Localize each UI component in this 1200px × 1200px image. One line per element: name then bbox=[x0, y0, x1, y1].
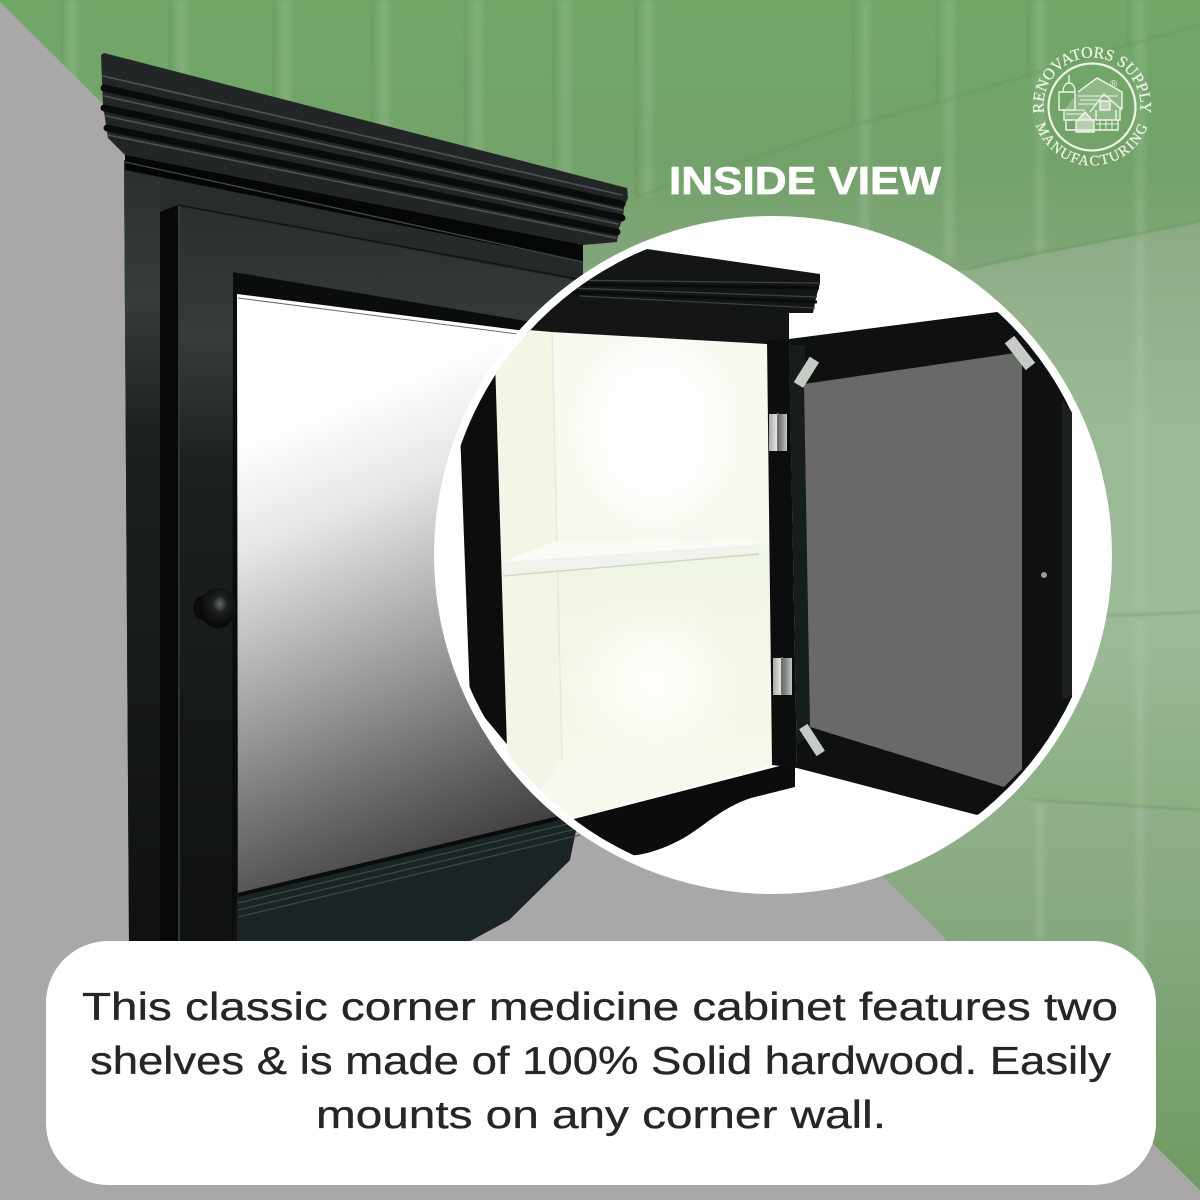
white lens disc bbox=[434, 216, 1112, 894]
logo house icon bbox=[1059, 75, 1122, 132]
interior side wall bbox=[496, 330, 562, 790]
description text: mounts on any corner wall. bbox=[316, 1094, 886, 1137]
mirror clips bbox=[794, 336, 1035, 756]
mirror front bbox=[237, 294, 580, 893]
mirror trim bbox=[232, 272, 580, 941]
inside view cabinet photo bbox=[460, 248, 1110, 860]
description text: shelves & is made of 100% Solid hardwood. Easily bbox=[90, 1040, 1112, 1083]
heading: inside view: INSIDE VIEW bbox=[669, 160, 941, 203]
inside view lens bbox=[434, 216, 1112, 894]
hinge top bbox=[769, 413, 787, 451]
description text bbox=[82, 986, 1118, 1137]
description panel bbox=[46, 941, 1156, 1185]
hinge bottom bbox=[773, 657, 792, 695]
hinge column bbox=[767, 339, 797, 768]
bottom rail bbox=[238, 811, 580, 941]
door stile and rails bbox=[180, 207, 583, 941]
cabinet body bbox=[124, 160, 583, 941]
door knob bbox=[193, 588, 236, 628]
interior floor bbox=[542, 760, 771, 819]
crown moulding bbox=[101, 53, 628, 262]
left side stile bbox=[124, 160, 160, 941]
cabinet apron bbox=[574, 766, 795, 856]
door mirror back bbox=[804, 352, 1022, 787]
front view cabinet bbox=[101, 53, 628, 941]
logo: Renovators Supply Manufacturing bbox=[1033, 46, 1152, 166]
back wall highlights bbox=[585, 345, 725, 735]
logo ring text bottom: MANUFACTURING bbox=[1036, 121, 1147, 166]
cornice inside bbox=[526, 249, 820, 345]
registered mark: ® bbox=[1110, 79, 1118, 90]
door screw bbox=[1041, 572, 1047, 578]
left door edge bbox=[460, 370, 507, 744]
description text: This classic corner medicine cabinet features two bbox=[82, 986, 1118, 1029]
open door frame bbox=[789, 312, 1072, 815]
door groove bbox=[160, 205, 178, 941]
logo ring text top: RENOVATORS SUPPLY bbox=[1033, 46, 1152, 114]
shelf bbox=[503, 540, 759, 576]
interior back wall bbox=[551, 332, 772, 765]
